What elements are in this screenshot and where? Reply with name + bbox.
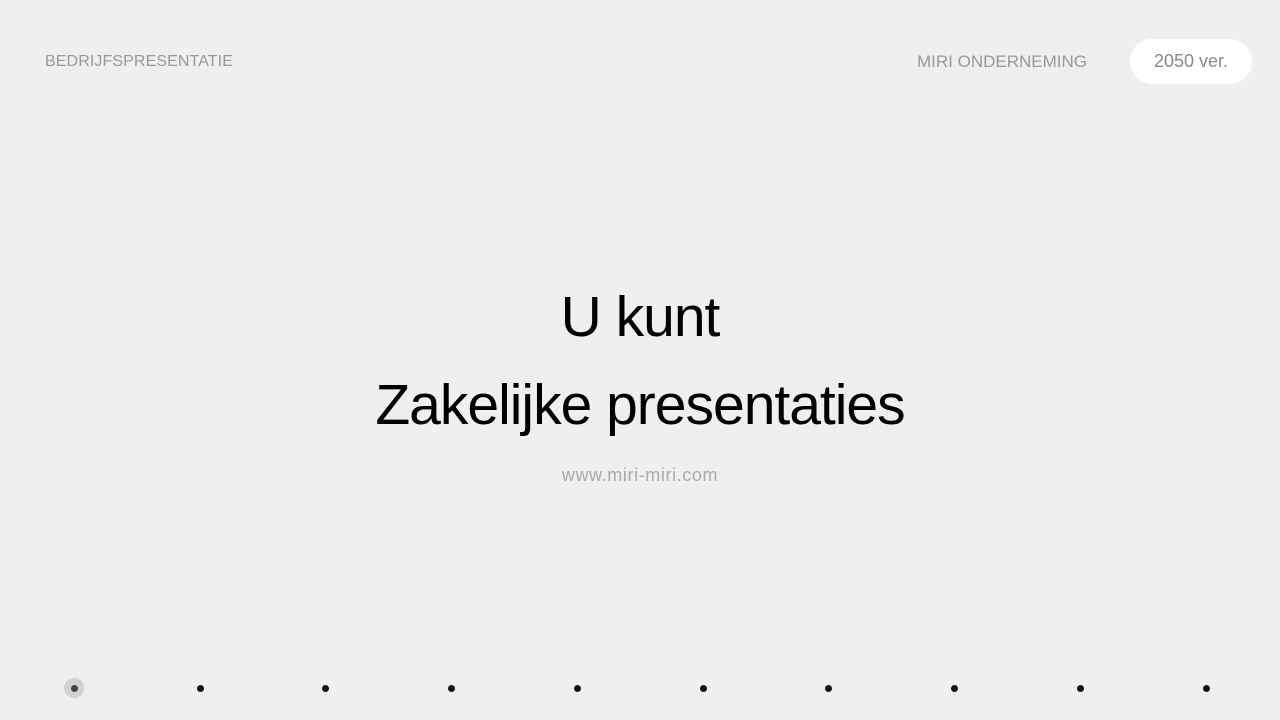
url: www.miri-miri.com (562, 465, 718, 485)
title: U kunt (561, 285, 719, 349)
header right: company name: MIRI ONDERNEMING (917, 52, 1087, 71)
version badge: 2050 ver. (1154, 51, 1228, 71)
header left: label: BEDRIJFSPRESENTATIE (45, 53, 233, 70)
version badge (1130, 39, 1252, 84)
title (375, 285, 905, 437)
title: Zakelijke presentaties (375, 373, 905, 437)
